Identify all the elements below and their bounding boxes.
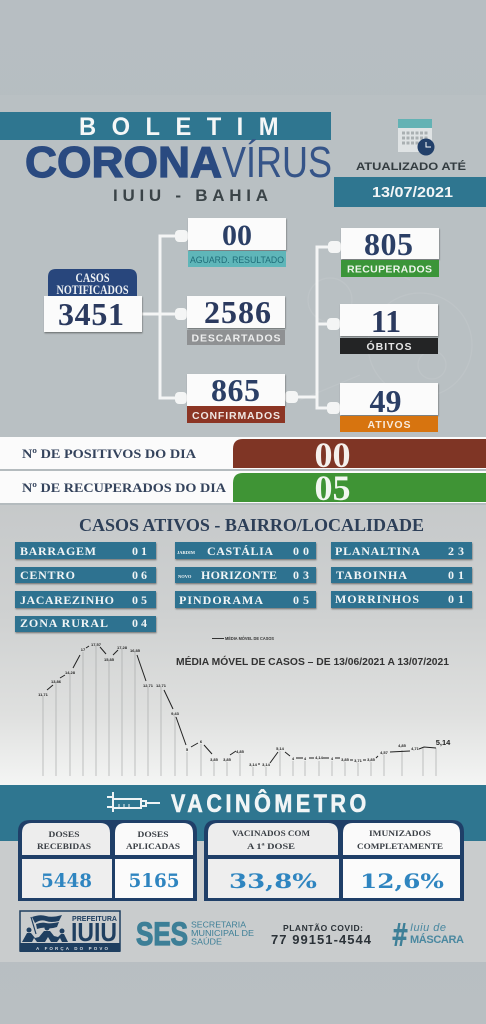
data labels: 15,85 [104,657,115,662]
data labels: 3,85 [210,757,219,762]
data labels: 11,71 [38,692,49,697]
data labels: 12,71 [156,683,167,688]
panel: neighborhood chips: CENTRO [20,568,75,582]
table: vaccination rates: IMUNIZADOS [369,828,431,838]
panel: deaths: 11 [371,303,401,339]
logo: Prefeitura Iuiu: PREFEITURA [72,916,117,923]
panel: neighborhood chips: MORRINHOS [335,592,419,606]
panel: discarded [187,294,285,345]
strip: recovered of the day: 05 [314,468,350,508]
header: bulletin title [0,112,332,205]
panel: recovered [341,226,439,277]
logo: Prefeitura Iuiu: A FORÇA DO POVO [36,946,108,951]
panel: neighborhood chips: BARRAGEM [20,544,96,558]
panel: neighborhood chips: 00 [293,544,309,558]
chart: moving average of cases [38,634,451,776]
table: vaccination rates [204,820,464,901]
covid hotline: 77 99151-4544 [271,932,372,947]
date bar [334,177,486,207]
data labels: 4,71 [411,746,420,751]
data labels: 5,14 [436,738,451,747]
data labels: 9,43 [171,711,180,716]
panel: cases notified: 3451 [58,296,124,332]
panel: awaiting result [188,218,286,267]
logo: Prefeitura Iuiu: IUIU [71,917,117,947]
background virus pattern [300,260,472,400]
date bar: 13/07/2021 [372,185,453,201]
hashtag: Iuiu de Máscara: # [391,916,409,954]
data labels: 12,71 [143,683,154,688]
title bar: BOLETIM: BOLETIM [79,113,279,141]
logo: Prefeitura Iuiu [20,911,120,952]
covid hotline: PLANTÃO COVID: [283,923,363,933]
hashtag: Iuiu de Máscara [391,916,464,954]
data labels: 4 [292,756,295,761]
chart line segments [47,646,436,764]
panel: neighborhood chips: PLANALTINA [335,544,420,558]
covid hotline [271,923,372,947]
data labels: 13,86 [51,679,62,684]
table: doses: DOSES [138,829,169,839]
data labels: 14,28 [65,670,76,675]
data labels: 5,14 [276,746,285,751]
chart legend [212,634,274,641]
panel: neighborhood chips: 06 [132,568,147,582]
data labels: 17 [81,647,86,652]
panel: neighborhood chips: 01 [132,544,147,558]
data labels [38,642,451,767]
data labels: 16,85 [130,648,141,653]
data labels: 3,14 [249,762,258,767]
panel: cases notified [44,269,142,332]
panel: vaccination section [0,785,486,962]
data labels: 3,71 [354,758,363,763]
strip: positives of the day: 00 [314,435,350,475]
panel: neighborhood chips: ZONA RURAL [20,616,108,630]
data labels: 4 [331,756,334,761]
panel: neighborhood chips [15,542,472,632]
data labels: 4 [304,756,307,761]
panel: confirmed: CONFIRMADOS [192,410,280,422]
table: doses: APLICADAS [126,841,180,851]
logo: SES [136,916,254,952]
table: vaccination rates: COMPLETAMENTE [357,841,443,851]
panel: cases notified: CASOS [76,270,110,285]
panel: active: ATIVOS [368,419,410,431]
title: CORONAVÍRUS: CORONA [25,138,222,187]
panel: neighborhood chips: CASTÁLIA [207,544,273,558]
panel: cases notified: NOTIFICADOS [56,282,128,297]
heading: active cases by neighborhood: CASOS ATIVOS - BAIRRO/LOCALIDADE [79,515,424,535]
table: doses: DOSES [48,829,80,839]
panel: awaiting result: 00 [222,219,252,252]
panel: neighborhood chips: 05 [132,593,147,607]
icon: flag and people [22,915,68,942]
panel: active: 49 [370,383,402,419]
hashtag: Iuiu de Máscara: Iuiu de [410,922,446,934]
panel: recovered: 805 [364,226,413,262]
strip: recovered of the day: Nº DE RECUPERADOS DO DIA [22,480,227,495]
chart title: MÉDIA MÓVEL DE CASOS – DE 13/06/2021 A 13/07/2021 [176,655,449,668]
panel: neighborhood chips: 04 [132,616,147,630]
chart legend: MÉDIA MÓVEL DE CASOS [225,634,274,641]
flow connectors [142,230,341,414]
logo: SES: SECRETARIA [191,920,246,930]
drop lines [43,647,436,776]
panel: neighborhood chips: 01 [448,592,464,606]
label: updated until: ATUALIZADO ATÉ [356,160,466,173]
panel: neighborhood chips: 05 [293,593,309,607]
panel: confirmed [187,372,285,423]
panel: discarded: 2586 [204,294,271,330]
data labels: 3,14 [262,762,271,767]
panel: neighborhood chips: 23 [448,544,464,558]
data labels: 4,14 [315,755,324,760]
table: doses: 5448 [41,870,92,892]
title: CORONAVÍRUS [25,138,332,187]
panel: discarded: DESCARTADOS [192,332,280,344]
panel: neighborhood chips: JARDIM [177,550,196,555]
icon: syringe [107,792,160,812]
title bar: BOLETIM [0,112,331,141]
logo: SES: SES [136,916,188,952]
data labels: 4,85 [398,743,407,748]
table: vaccination rates: A 1ª DOSE [247,841,295,851]
panel: neighborhood chips: TABOINHA [336,568,407,582]
logo: SES: MUNICIPAL DE [191,928,254,938]
table: vaccination rates: 12,6% [360,869,444,893]
data labels: 6 [200,739,203,744]
data labels: 17,57 [91,642,102,647]
table: doses: 5165 [128,870,180,892]
panel: confirmed: 865 [211,372,260,408]
data labels: 3,85 [223,757,232,762]
panel: neighborhood chips: 01 [448,568,464,582]
panel: neighborhood chips: HORIZONTE [201,568,277,582]
title: CORONAVÍRUS: VÍRUS [222,138,332,187]
logo: SES: SAÚDE [191,936,222,946]
subtitle: location: IUIU - BAHIA [113,186,268,205]
panel: neighborhood chips: NOVO [178,574,192,579]
data labels: 17,28 [117,645,128,650]
hashtag: Iuiu de Máscara: MÁSCARA [410,933,464,946]
table: doses: RECEBIDAS [37,841,91,851]
data labels: 4,57 [380,750,389,755]
data labels: 3,85 [341,757,350,762]
panel: active [340,383,438,432]
panel: recovered: RECUPERADOS [347,264,432,276]
table: vaccination rates: VACINADOS COM [232,828,311,838]
data labels: 5 [186,747,189,752]
data labels: 3,85 [367,757,376,762]
icon: calendar with clock [398,119,434,156]
light chart background [0,505,486,785]
panel: neighborhood chips: PINDORAMA [179,593,263,607]
panel: deaths: ÓBITOS [366,340,412,353]
panel: deaths [340,303,438,354]
panel: neighborhood chips: JACAREZINHO [20,593,114,607]
table: doses [18,820,197,901]
strip: positives of the day [0,435,486,475]
data labels: 4,85 [236,749,245,754]
strip: positives of the day: Nº DE POSITIVOS DO DIA [22,446,197,461]
table: vaccination rates: 33,8% [229,869,317,893]
panel: neighborhood chips: 03 [293,568,309,582]
update date panel [334,160,486,207]
strip: recovered of the day [0,468,486,508]
heading: vaccinometer: VACINÔMETRO [171,788,366,817]
panel: awaiting result: AGUARD. RESULTADO [190,255,284,265]
